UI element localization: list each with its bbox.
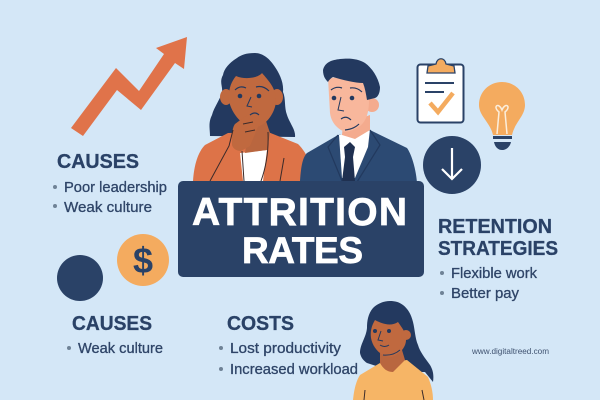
text block: costs: COSTS (227, 313, 294, 335)
icon: dollar coin: $ (133, 240, 153, 281)
text block: retention strategies (438, 216, 558, 302)
text block: causes top: Poor leadership (64, 180, 167, 196)
text block: costs (219, 313, 358, 378)
icon: light bulb (479, 82, 525, 150)
text block: causes bottom (67, 313, 163, 357)
text block: retention strategies: Flexible work (451, 266, 538, 282)
icon: navy circle (57, 255, 103, 301)
text block: causes top: CAUSES (57, 151, 139, 173)
text block: causes bottom: CAUSES (72, 313, 152, 335)
icon: clipboard (418, 59, 464, 122)
banner: attrition rates: RATES (242, 230, 363, 271)
website url: www.digitaltreed.com (471, 347, 549, 356)
text block: costs: Increased workload (230, 362, 358, 378)
illustration: worried man (300, 59, 417, 183)
text block: causes top (53, 151, 167, 216)
banner: attrition rates (178, 181, 424, 277)
text block: causes top: Weak culture (64, 200, 152, 216)
text block: retention strategies: STRATEGIES (438, 238, 558, 260)
text block: costs: Lost productivity (230, 341, 342, 357)
text block: retention strategies: Better pay (451, 286, 520, 302)
icon: down arrow circle (423, 136, 481, 194)
illustration: worried woman (193, 53, 308, 181)
banner: attrition rates: ATTRITION (192, 191, 407, 234)
text block: retention strategies: RETENTION (438, 216, 552, 238)
illustration: smiling woman (353, 301, 433, 400)
icon: rising arrow (71, 37, 187, 136)
text block: causes bottom: Weak culture (78, 341, 163, 357)
icon: dollar coin (117, 234, 169, 286)
